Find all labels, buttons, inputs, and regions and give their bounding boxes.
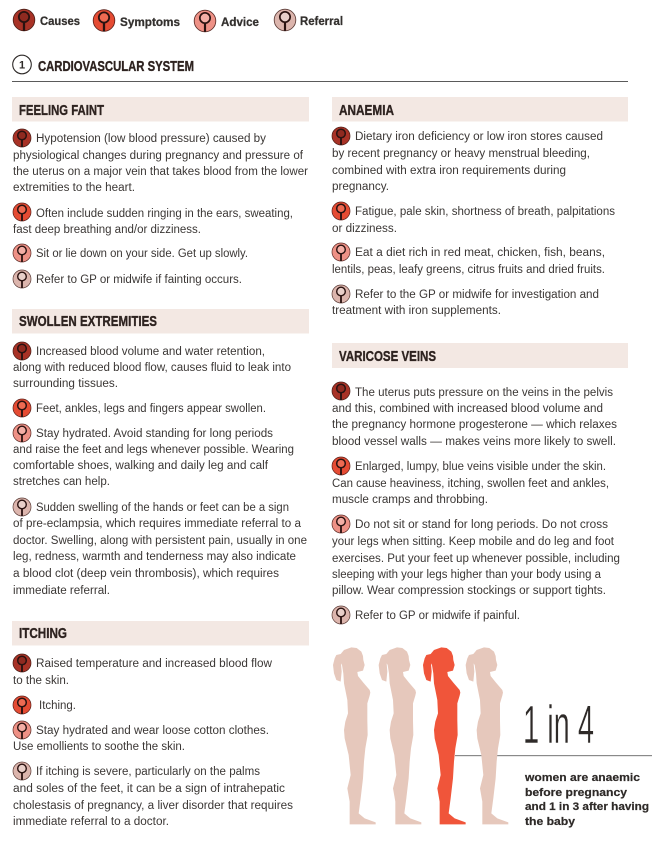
advice text: Stay hydrated. Avoid standing for long periods xyxy=(36,428,273,440)
statistic caption xyxy=(524,772,649,828)
referral text: immediate referral. xyxy=(13,585,110,597)
symptoms text: Fatigue, pale skin, shortness of breath, palpitations xyxy=(355,206,615,218)
section heading: cardiovascular system: CARDIOVASCULAR SYSTEM xyxy=(38,59,194,75)
causes text: by recent pregnancy or heavy menstrual bleeding, xyxy=(332,148,590,160)
referral text: doctor. Swelling, along with persistent pain, usually in one xyxy=(13,535,307,547)
panel: varicose veins xyxy=(332,343,628,624)
symptoms text: Can cause heaviness, itching, swollen feet and ankles, xyxy=(332,478,609,490)
advice text xyxy=(13,424,294,488)
advice text: comfortable shoes, walking and daily leg and calf xyxy=(13,460,269,472)
statistic caption: before pregnancy xyxy=(525,787,628,799)
causes text: along with reduced blood flow, causes fluid to leak into xyxy=(13,362,291,374)
legend xyxy=(13,9,343,32)
referral text: Refer to the GP or midwife for investigation and xyxy=(355,289,599,301)
heading: anaemia xyxy=(332,97,628,122)
callout: 1 in 4 women xyxy=(333,647,652,828)
symptoms text xyxy=(13,696,76,714)
icon: referral xyxy=(274,9,296,31)
section heading: cardiovascular system: 1 xyxy=(19,60,25,72)
heading: feeling faint xyxy=(12,97,309,122)
advice text xyxy=(332,243,605,276)
causes text: Increased blood volume and water retention, xyxy=(36,346,265,358)
heading: swollen extremities xyxy=(12,309,309,334)
statistic caption: women are anaemic xyxy=(524,772,640,784)
causes text xyxy=(332,127,603,193)
causes text xyxy=(332,382,617,448)
icon: advice xyxy=(194,10,216,32)
advice text: exercises. Put your feet up whenever possible, including xyxy=(332,553,620,565)
heading: itching: ITCHING xyxy=(19,626,67,642)
symptoms text xyxy=(332,457,609,506)
icon: causes xyxy=(13,9,35,31)
symptoms text: Itching. xyxy=(39,700,76,712)
big statistic: 1 in 4 xyxy=(523,695,594,755)
referral text: Sudden swelling of the hands or feet can be a sign xyxy=(36,502,289,514)
causes text: and this, combined with increased blood volume and xyxy=(332,403,603,415)
rule line xyxy=(455,755,652,756)
icon: symptoms xyxy=(93,10,115,31)
advice text: stretches can help. xyxy=(13,476,110,488)
legend label: symptoms: Symptoms xyxy=(120,17,180,29)
advice text: Sit or lie down on your side. Get up slowly. xyxy=(36,248,248,260)
referral text: cholestasis of pregnancy, a liver disorder that requires xyxy=(13,800,293,812)
causes text xyxy=(13,342,291,390)
causes text: Dietary iron deficiency or low iron stores caused xyxy=(355,131,603,143)
chart: four silhouettes, one highlighted xyxy=(333,647,508,824)
causes text: the pregnancy hormone progesterone — which relaxes xyxy=(332,419,617,431)
legend label: referral: Referral xyxy=(300,16,343,28)
symptoms text: Feet, ankles, legs and fingers appear swollen. xyxy=(36,403,266,415)
legend label: causes: Causes xyxy=(40,16,80,28)
causes text: combined with extra iron requirements during xyxy=(332,165,566,177)
referral text: a blood clot (deep vein thrombosis), which requires xyxy=(13,568,279,580)
advice text: pillow. Wear compression stockings or support tights. xyxy=(332,585,606,597)
referral text xyxy=(13,762,293,828)
symptoms text: Enlarged, lumpy, blue veins visible under the skin. xyxy=(355,461,606,473)
panel: feeling faint xyxy=(12,97,309,288)
causes text: the uterus on a major vein that takes blood from the lower xyxy=(13,166,308,178)
heading: itching xyxy=(12,621,309,646)
referral text: Refer to GP or midwife if painful. xyxy=(355,610,520,622)
referral text: immediate referral to a doctor. xyxy=(13,816,169,828)
symptoms text xyxy=(13,203,293,236)
referral text xyxy=(332,606,520,624)
legend label: advice: Advice xyxy=(221,17,259,29)
referral text: of pre-eclampsia, which requires immediate referral to a xyxy=(13,518,302,530)
symptoms text: or dizziness. xyxy=(332,223,397,235)
symptoms text xyxy=(332,202,615,235)
referral text: and soles of the feet, it can be a sign of intrahepatic xyxy=(13,783,285,795)
advice text: Use emollients to soothe the skin. xyxy=(13,741,185,753)
panel: itching xyxy=(12,621,309,828)
referral text xyxy=(13,270,242,288)
causes text: Hypotension (low blood pressure) caused by xyxy=(36,133,266,145)
heading: anaemia: ANAEMIA xyxy=(339,103,394,119)
causes text: to the skin. xyxy=(13,675,69,687)
statistic caption: the baby xyxy=(525,816,576,828)
causes text xyxy=(13,129,308,194)
symptoms text xyxy=(13,399,266,417)
causes text: blood vessel walls — makes veins more likely to swell. xyxy=(332,436,616,448)
referral text: Refer to GP or midwife if fainting occurs. xyxy=(36,274,242,286)
advice text: sleeping with your legs higher than your body using a xyxy=(332,569,602,581)
symptoms text: fast deep breathing and/or dizziness. xyxy=(13,224,201,236)
symptoms text: Often include sudden ringing in the ears, sweating, xyxy=(36,208,293,220)
causes text: pregnancy. xyxy=(332,181,389,193)
panel: anaemia xyxy=(332,97,628,317)
advice text: and raise the feet and legs whenever possible. Wearing xyxy=(13,444,294,456)
causes text: surrounding tissues. xyxy=(13,378,118,390)
section heading: cardiovascular system xyxy=(12,55,628,82)
advice text xyxy=(332,515,620,597)
advice text: Stay hydrated and wear loose cotton clothes. xyxy=(36,725,269,737)
heading: swollen extremities: SWOLLEN EXTREMITIES xyxy=(19,314,157,330)
causes text: Raised temperature and increased blood flow xyxy=(36,658,273,670)
symptoms text: muscle cramps and throbbing. xyxy=(332,494,488,506)
statistic caption: and 1 in 3 after having xyxy=(525,801,649,813)
advice text xyxy=(13,721,269,753)
causes text: physiological changes during pregnancy and pressure of xyxy=(13,150,304,162)
referral text xyxy=(13,498,307,597)
advice text: Do not sit or stand for long periods. Do not cross xyxy=(355,519,608,531)
advice text: Eat a diet rich in red meat, chicken, fish, beans, xyxy=(355,247,605,259)
referral text xyxy=(332,285,599,317)
panel: swollen extremities xyxy=(12,309,309,597)
advice text: your legs when sitting. Keep mobile and do leg and foot xyxy=(332,536,615,548)
heading: varicose veins: VARICOSE VEINS xyxy=(339,349,436,365)
heading: feeling faint: FEELING FAINT xyxy=(19,103,104,119)
causes text: extremities to the heart. xyxy=(13,182,135,194)
causes text xyxy=(13,654,273,687)
advice text xyxy=(13,244,248,262)
heading: varicose veins xyxy=(332,343,628,368)
referral text: leg, redness, warmth and tenderness may also indicate xyxy=(13,551,296,563)
referral text: If itching is severe, particularly on the palms xyxy=(36,766,260,778)
causes text: The uterus puts pressure on the veins in the pelvis xyxy=(355,387,613,399)
advice text: lentils, peas, leafy greens, citrus fruits and dried fruits. xyxy=(332,264,605,276)
referral text: treatment with iron supplements. xyxy=(332,305,501,317)
